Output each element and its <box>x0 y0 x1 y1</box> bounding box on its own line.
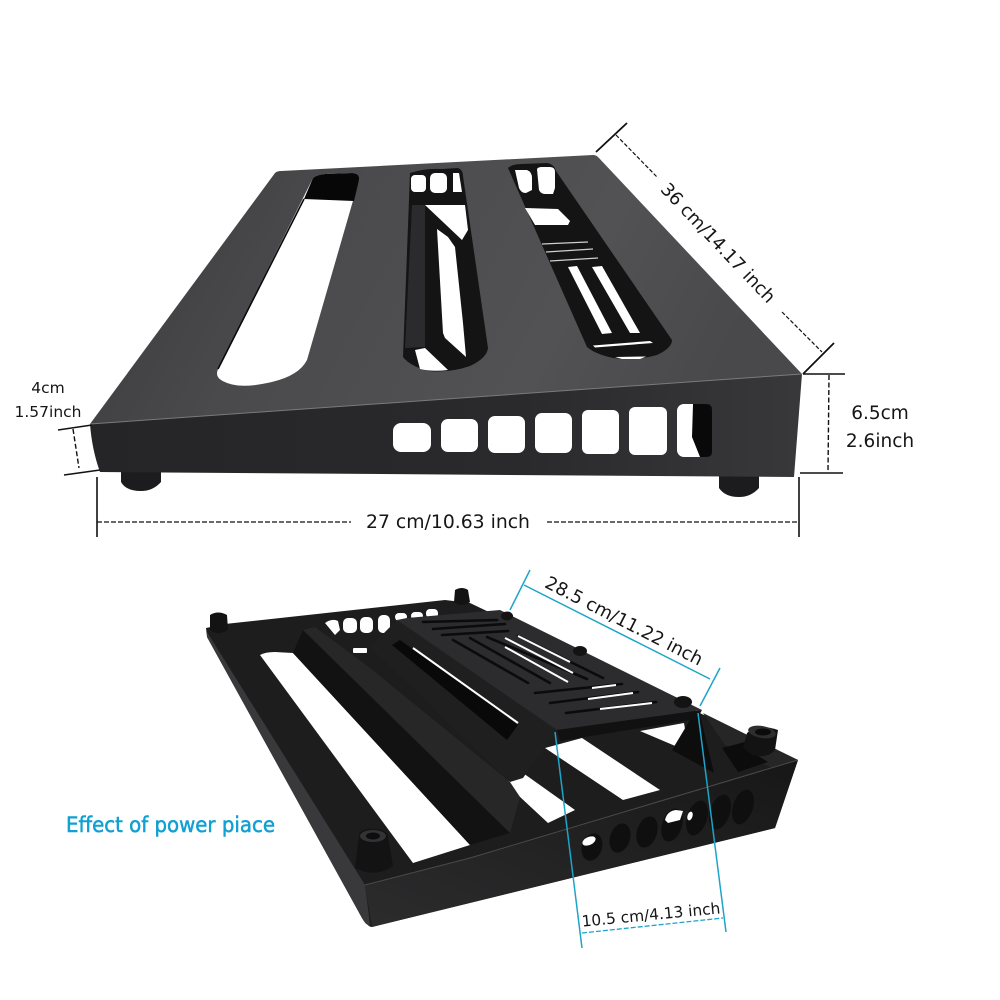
dimension: plate width 10.5 cm: 10.5 cm/4.13 inch <box>581 899 721 931</box>
power plate side panel <box>370 620 557 782</box>
plate studs and frame posts <box>210 588 778 873</box>
power plate top <box>397 610 702 741</box>
bottom product: open frame with power plate <box>206 588 798 927</box>
feet <box>121 470 759 497</box>
left slot <box>217 173 359 386</box>
post caps <box>360 724 777 842</box>
dimension: width 27 cm <box>97 477 799 537</box>
dimension: width 27 cm: 27 cm/10.63 inch <box>366 512 530 533</box>
dimension: rear height 6.5 cm <box>800 374 914 473</box>
top product: assembled pedalboard <box>90 155 802 497</box>
dimension: rear height 6.5 cm: 2.6inch <box>846 431 914 452</box>
right side rail <box>703 713 798 768</box>
plate bracket <box>672 715 714 773</box>
dimension: plate length 28.5 cm: 28.5 cm/11.22 inch <box>541 573 706 670</box>
right slot <box>508 163 672 359</box>
dimension: front height 4 cm: 4cm <box>31 379 65 397</box>
right corner pocket <box>722 742 768 772</box>
front wall with holes <box>365 760 798 927</box>
middle slot <box>403 168 488 371</box>
left outer wall <box>207 632 370 925</box>
dimension: length 36 cm: 36 cm/14.17 inch <box>656 179 779 308</box>
dimension: front height 4 cm <box>14 379 100 475</box>
dimension: plate length 28.5 cm <box>510 570 720 706</box>
groove beside centre rail <box>293 630 510 845</box>
white gaps through the frame <box>260 652 686 863</box>
back wall holes <box>325 609 438 653</box>
front wall with cable holes <box>90 374 802 477</box>
dimension: plate width 10.5 cm <box>555 713 726 948</box>
dimension: front height 4 cm: 1.57inch <box>14 403 82 421</box>
caption: effect of power place: Effect of power piace <box>66 813 275 837</box>
centre rail <box>303 627 520 833</box>
dimension: length 36 cm <box>596 123 834 374</box>
dimension: rear height 6.5 cm: 6.5cm <box>851 403 909 424</box>
frame silhouette <box>206 600 798 927</box>
top face with slots <box>90 155 802 424</box>
